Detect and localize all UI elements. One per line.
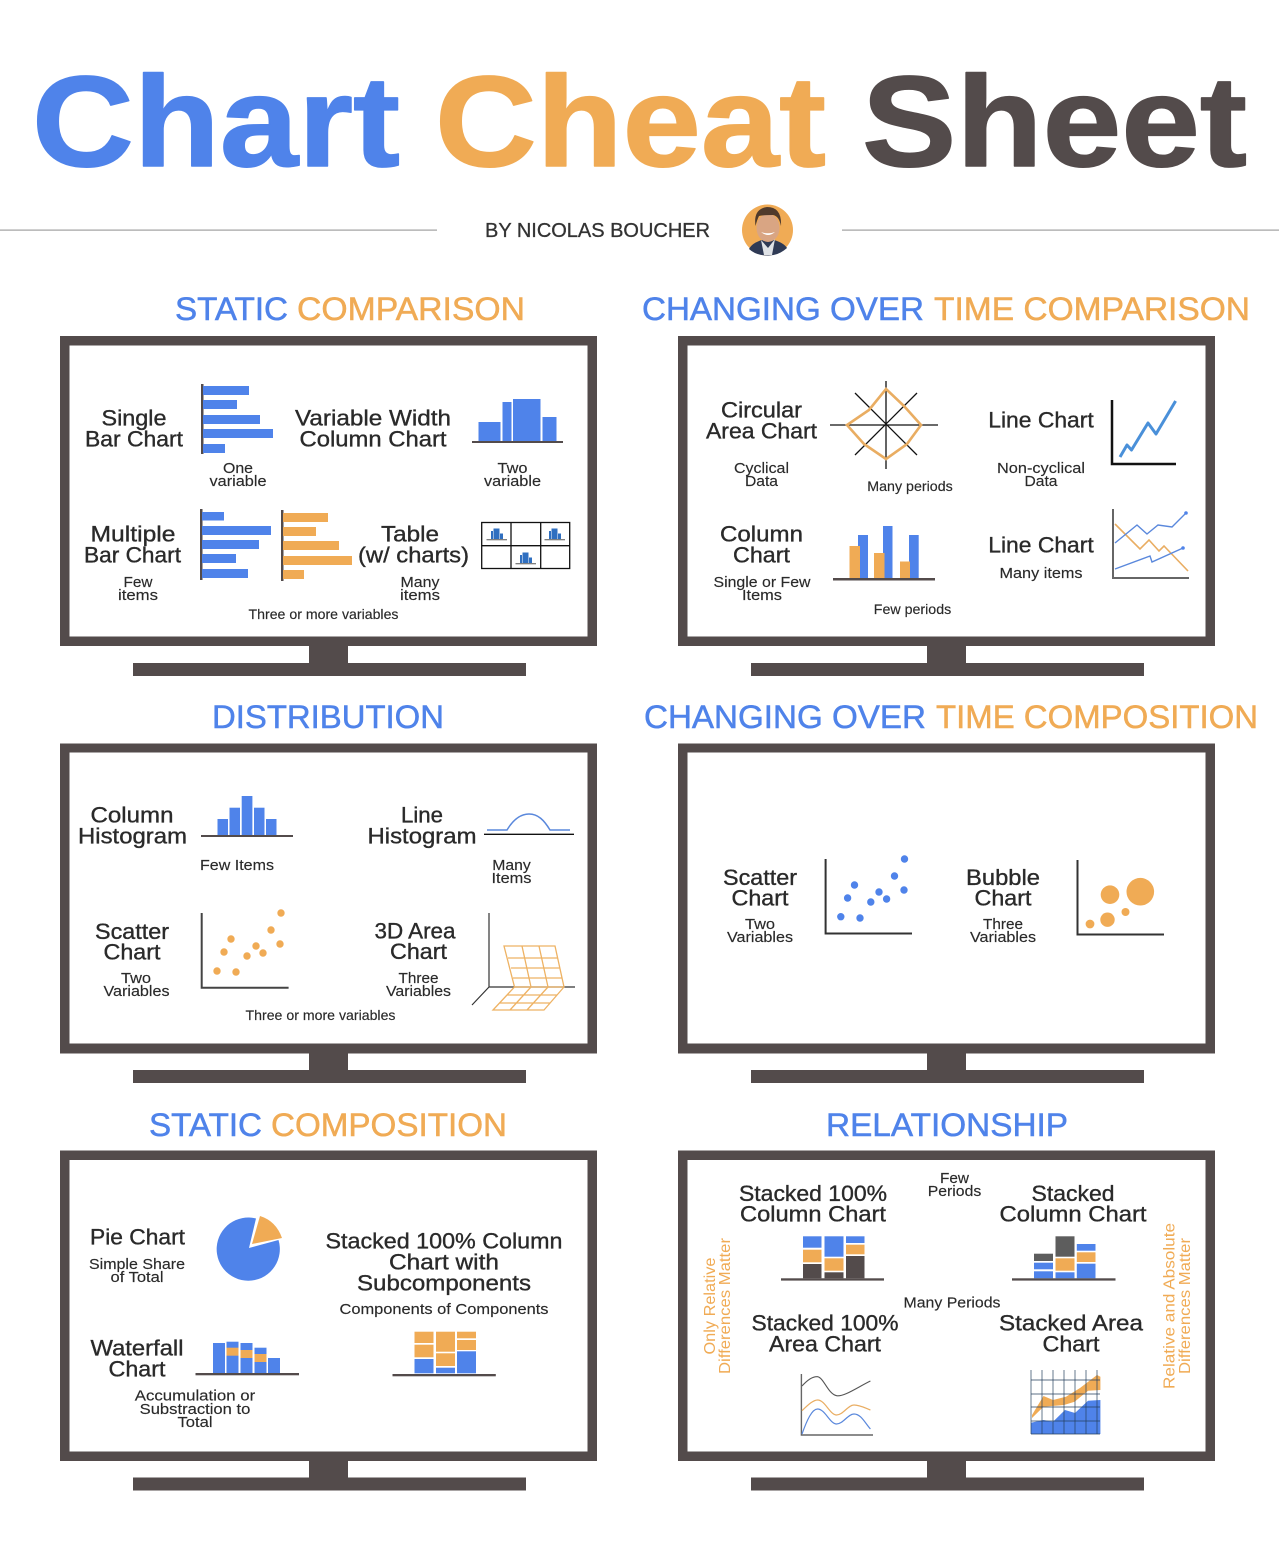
- label: stacked 100% column chart: [739, 1181, 887, 1226]
- chart: single line: [1112, 400, 1176, 464]
- label: scatter chart: Chart: [104, 940, 160, 964]
- note: three variables: Variables: [970, 929, 1036, 946]
- note: few periods: [928, 1170, 981, 1200]
- label: scatter chart: [95, 919, 169, 964]
- label: 3D area chart: [374, 918, 456, 964]
- panel: changing over time comparison: [678, 336, 1215, 676]
- heading: static comparison: [175, 291, 525, 327]
- chart: stacked column with subcomponents: [392, 1332, 496, 1376]
- heading: static composition: COMPOSITION: [271, 1107, 507, 1143]
- label: column histogram: [78, 802, 187, 848]
- label: table with charts: [358, 522, 469, 568]
- monitor frame: [60, 336, 597, 676]
- note: only relative differences matter: [702, 1237, 734, 1374]
- heading: changing over time composition: CHANGING OVER: [644, 699, 926, 735]
- note: few items: items: [118, 587, 158, 604]
- note: many items: Many: [492, 857, 531, 874]
- note: three variables: Three: [983, 916, 1023, 933]
- label: stacked area chart: Stacked Area: [999, 1310, 1144, 1336]
- label: scatter chart: Scatter: [723, 865, 797, 890]
- panel: changing over time composition: [678, 744, 1215, 1083]
- note: few items: Few Items: [200, 857, 274, 874]
- note: many items: items: [400, 587, 440, 604]
- monitor frame: [60, 744, 597, 1083]
- label: scatter chart: [723, 865, 797, 910]
- chart: waterfall: [196, 1342, 299, 1375]
- note: only relative differences matter: Differences Matter: [717, 1237, 734, 1374]
- chart: stacked 100% column: [781, 1236, 884, 1281]
- label: line chart: Line Chart: [988, 408, 1094, 432]
- note: non-cyclical data: Non-cyclical: [997, 460, 1085, 477]
- label: stacked 100% column chart with subcomponents: Subcomponents: [357, 1270, 531, 1296]
- chart: blue scatter: [826, 855, 912, 934]
- note: two variable: variable: [484, 473, 541, 490]
- note: three variables: Three: [398, 970, 438, 987]
- note: one variable: [210, 460, 266, 490]
- chart: pie: [217, 1216, 282, 1281]
- label: column chart: Column: [720, 522, 803, 546]
- chart: stacked 100% area lines: [801, 1374, 873, 1435]
- heading: static comparison: COMPARISON: [297, 291, 525, 327]
- heading: static composition: [149, 1107, 507, 1143]
- note: single or few items: Items: [742, 587, 782, 604]
- label: column chart: Chart: [733, 542, 790, 568]
- label: stacked area chart: [999, 1310, 1144, 1356]
- note: many items: Many: [400, 574, 440, 591]
- label: stacked 100% column chart: Stacked 100%: [739, 1181, 887, 1206]
- label: line histogram: [368, 802, 476, 848]
- label: scatter chart: Scatter: [95, 919, 169, 944]
- note: cyclical data: Cyclical: [734, 460, 789, 477]
- note: few periods: Few periods: [874, 601, 951, 617]
- note: single or few items: [714, 574, 811, 604]
- label: single bar chart: Bar Chart: [85, 426, 183, 452]
- label: column histogram: Histogram: [78, 824, 187, 848]
- chart: stacked area: [1031, 1370, 1100, 1434]
- label: single bar chart: Single: [102, 406, 166, 430]
- note: accumulation or substraction to total: Total: [178, 1414, 212, 1431]
- label: table with charts: Table: [381, 522, 439, 546]
- chart: variable width column: [472, 399, 563, 443]
- monitor frame: [60, 1150, 597, 1490]
- label: stacked area chart: Chart: [1042, 1332, 1100, 1356]
- note: relative and absolute differences matter: [1162, 1223, 1194, 1389]
- note: many periods: Many Periods: [904, 1294, 1000, 1312]
- note: two variables: Variables: [727, 929, 793, 946]
- note: one variable: variable: [210, 473, 266, 490]
- title: Cheat: [435, 50, 826, 194]
- label: scatter chart: Chart: [732, 886, 788, 910]
- note: simple share of total: Simple Share: [89, 1256, 185, 1273]
- note: three or more variables: Three or more variables: [248, 606, 398, 622]
- note: non-cyclical data: [997, 460, 1085, 490]
- icon: author portrait: [742, 204, 793, 256]
- heading: changing over time composition: TIME COMPOSITION: [936, 699, 1258, 735]
- note: three variables: Variables: [386, 983, 451, 1000]
- title: [32, 50, 1247, 194]
- note: two variable: [484, 460, 541, 490]
- label: table with charts: (w/ charts): [358, 542, 469, 568]
- note: two variables: [727, 916, 793, 946]
- label: 3D area chart: 3D Area: [374, 918, 456, 944]
- label: stacked 100% area chart: Area Chart: [769, 1332, 881, 1356]
- note: three variables: [386, 970, 451, 1000]
- label: stacked 100% column chart with subcomponents: Stacked 100% Column: [326, 1228, 562, 1254]
- chart: stacked column: [1012, 1236, 1116, 1281]
- panel: static comparison: [60, 336, 597, 676]
- chart: column histogram: [201, 796, 293, 837]
- heading: relationship: RELATIONSHIP: [826, 1107, 1068, 1143]
- note: simple share of total: of Total: [110, 1269, 164, 1286]
- chart: multiple bar blue: [200, 509, 271, 580]
- panel: static composition: [60, 1150, 597, 1490]
- note: few items: [118, 574, 158, 604]
- label: column chart: [720, 522, 803, 568]
- title: Chart: [32, 50, 400, 194]
- note: two variables: Variables: [104, 983, 170, 1000]
- note: accumulation or substraction to total: Substraction to: [140, 1401, 250, 1418]
- label: multiple bar chart: Multiple: [90, 522, 176, 546]
- monitor frame: [678, 744, 1215, 1083]
- heading: distribution: DISTRIBUTION: [212, 699, 444, 735]
- heading: changing over time comparison: [642, 291, 1250, 327]
- note: cyclical data: [734, 460, 789, 490]
- note: two variables: [104, 970, 170, 1000]
- note: three variables: [970, 916, 1036, 946]
- label: stacked 100% column chart with subcomponents: Chart with: [389, 1250, 499, 1274]
- label: pie chart: Pie Chart: [90, 1224, 185, 1250]
- label: column histogram: Column: [90, 802, 174, 828]
- heading: static composition: STATIC: [149, 1107, 262, 1143]
- note: two variables: Two: [745, 916, 775, 933]
- chart: multiple bar orange: [281, 510, 352, 581]
- note: many items: Many items: [1000, 565, 1082, 582]
- chart: multi line: [1113, 509, 1189, 578]
- label: circular area chart: [706, 398, 817, 444]
- label: waterfall chart: Chart: [108, 1356, 166, 1382]
- note: components of components: Components of Components: [340, 1301, 548, 1318]
- label: bubble chart: [966, 865, 1040, 910]
- heading: changing over time comparison: CHANGING OVER: [642, 291, 924, 327]
- note: single or few items: Single or Few: [714, 574, 811, 591]
- monitor frame: [678, 1150, 1215, 1490]
- chart: table with mini charts: [482, 522, 570, 568]
- label: stacked column chart: Column Chart: [1000, 1202, 1146, 1226]
- heading: changing over time comparison: TIME COMPARISON: [934, 291, 1250, 327]
- label: stacked column chart: [1000, 1181, 1146, 1226]
- panel: relationship: [678, 1150, 1215, 1490]
- note: few items: Few: [124, 574, 153, 591]
- note: few periods: Few: [940, 1170, 969, 1187]
- note: many items: [400, 574, 440, 604]
- label: variable width column chart: [295, 406, 451, 452]
- label: multiple bar chart: [84, 522, 181, 568]
- label: stacked 100% area chart: [752, 1310, 898, 1356]
- note: many items: [492, 857, 532, 887]
- note: cyclical data: Data: [745, 473, 779, 490]
- panel: distribution: [60, 744, 597, 1083]
- label: line histogram: Line: [401, 802, 443, 828]
- note: relative and absolute differences matter: Differences Matter: [1177, 1237, 1194, 1374]
- label: variable width column chart: Variable Width: [295, 406, 451, 430]
- label: stacked column chart: Stacked: [1032, 1181, 1114, 1206]
- monitor frame: [678, 336, 1215, 676]
- note: few periods: Periods: [928, 1183, 981, 1200]
- label: 3D area chart: Chart: [390, 939, 447, 964]
- note: accumulation or substraction to total: [135, 1388, 255, 1431]
- note: many items: Items: [492, 870, 532, 887]
- label: stacked 100% column chart: Column Chart: [740, 1202, 886, 1226]
- heading: changing over time composition: [644, 699, 1258, 735]
- label: bubble chart: Bubble: [966, 865, 1040, 890]
- label: bubble chart: Chart: [974, 886, 1032, 910]
- label: multiple bar chart: Bar Chart: [84, 542, 181, 568]
- label: circular area chart: Circular: [721, 398, 802, 422]
- chart: radar: [830, 381, 938, 469]
- chart: orange scatter: [202, 909, 289, 988]
- label: line histogram: Histogram: [368, 824, 476, 848]
- note: two variables: Two: [121, 970, 151, 987]
- chart: single bar: [201, 384, 273, 454]
- note: simple share of total: [89, 1256, 185, 1286]
- chart: bubble: [1078, 860, 1164, 934]
- chart: line histogram: [484, 814, 574, 834]
- label: variable width column chart: Column Chart: [300, 426, 446, 452]
- note: two variable: Two: [498, 460, 528, 477]
- note: accumulation or substraction to total: Accumulation or: [135, 1388, 255, 1404]
- note: many periods: Many periods: [867, 478, 953, 494]
- chart: 3D area: [472, 913, 575, 1010]
- note: three or more variables: Three or more variables: [246, 1007, 396, 1023]
- byline: BY NICOLAS BOUCHER: [485, 220, 710, 242]
- label: circular area chart: Area Chart: [706, 418, 817, 444]
- heading: static comparison: STATIC: [175, 291, 288, 327]
- note: non-cyclical data: Data: [1024, 473, 1058, 490]
- note: only relative differences matter: Only Relative: [702, 1257, 719, 1354]
- title: Sheet: [862, 50, 1247, 194]
- label: stacked 100% area chart: Stacked 100%: [752, 1310, 898, 1336]
- label: single bar chart: [85, 406, 183, 452]
- note: one variable: One: [223, 460, 253, 477]
- chart: clustered column: [833, 526, 935, 580]
- label: waterfall chart: [90, 1336, 184, 1382]
- label: line chart many items: Line Chart: [988, 532, 1094, 558]
- note: relative and absolute differences matter: Relative and Absolute: [1162, 1223, 1178, 1389]
- label: waterfall chart: Waterfall: [90, 1336, 184, 1360]
- label: stacked 100% column chart with subcomponents: [326, 1228, 562, 1296]
